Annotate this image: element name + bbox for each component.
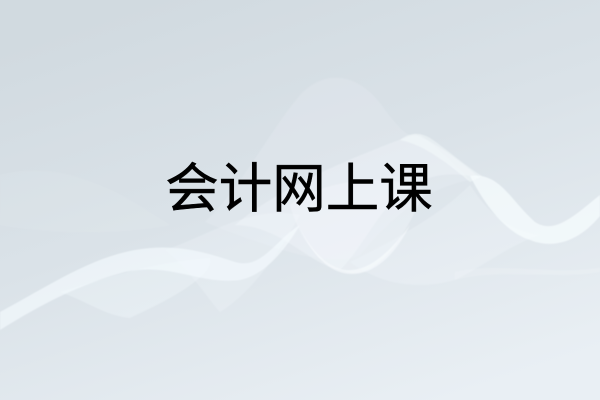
lower right lobe <box>350 185 540 285</box>
lower-left fold <box>60 258 210 318</box>
main ribbon <box>0 225 300 330</box>
centre lobe bright edge <box>300 225 410 274</box>
crest bright edge <box>400 134 482 182</box>
bright right fold <box>470 176 600 244</box>
faint tall hump <box>205 78 470 260</box>
centre lobe <box>290 180 425 273</box>
faint left band <box>0 171 170 232</box>
title: 会计网上课 <box>165 160 433 219</box>
thin band to right edge <box>455 268 600 280</box>
crest ribbon <box>235 134 480 270</box>
second fold <box>165 213 300 312</box>
